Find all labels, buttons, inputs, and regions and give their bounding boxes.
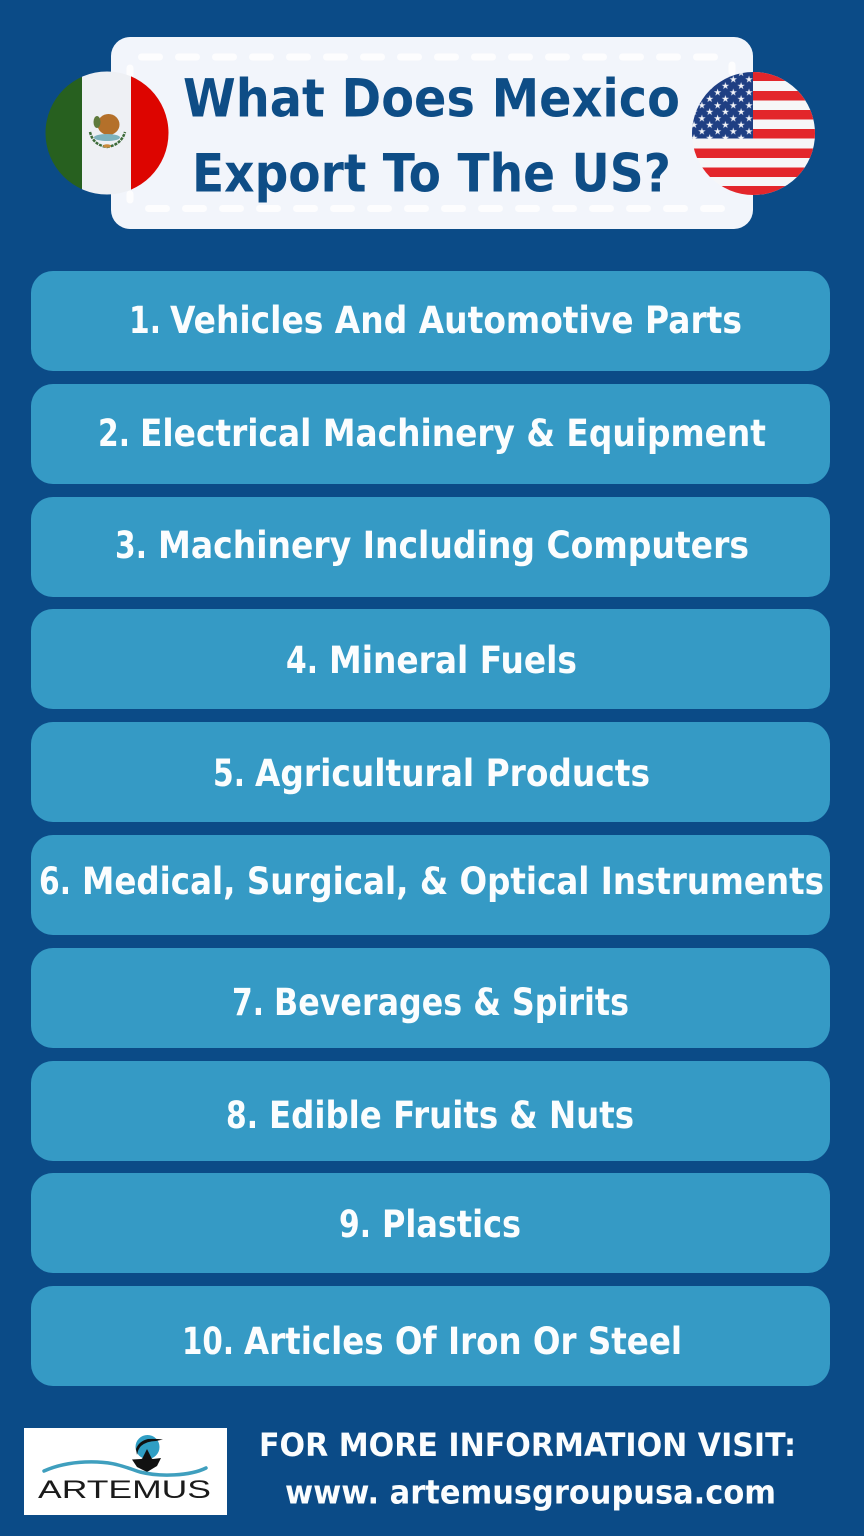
panel: item 4: 4.: [286, 639, 318, 682]
panel: item 9: 9.: [339, 1203, 371, 1246]
panel: item 1: [31, 271, 830, 371]
panel: item 8: 8.: [226, 1094, 258, 1137]
panel: item 6: 6.: [39, 860, 71, 903]
panel: item 5: 5.: [213, 752, 245, 795]
panel: item 4: [31, 609, 830, 709]
title text: Export To The US?: [192, 144, 671, 204]
panel: item 3: 3.: [115, 524, 147, 567]
panel: item 2: Electrical Machinery & Equipment: [140, 412, 766, 455]
panel: item 9: [31, 1173, 830, 1273]
panel: item 4: Mineral Fuels: [329, 639, 577, 682]
panel: item 2: 2.: [98, 412, 130, 455]
panel: item 8: Edible Fruits & Nuts: [269, 1094, 634, 1137]
panel: item 5: Agricultural Products: [255, 752, 650, 795]
panel: item 10: [31, 1286, 830, 1386]
panel: item 10: Articles Of Iron Or Steel: [244, 1320, 682, 1363]
icon: US flag: [692, 72, 816, 196]
title text: What Does Mexico: [183, 68, 680, 130]
panel: item 7: Beverages & Spirits: [274, 981, 629, 1024]
panel: item 8: [31, 1061, 830, 1161]
logo: Artemus: ARTEMUS: [38, 1476, 211, 1504]
panel: item 3: [31, 497, 830, 597]
footer text: FOR MORE INFORMATION VISIT:: [259, 1426, 796, 1464]
footer text: [259, 1426, 796, 1512]
panel: item 10: 10.: [182, 1320, 234, 1363]
panel: item 7: [31, 948, 830, 1048]
panel: item 2: [31, 384, 830, 484]
panel: item 1: Vehicles And Automotive Parts: [170, 299, 742, 342]
title text: [183, 68, 680, 204]
title panel: [111, 37, 753, 229]
panel: item 3: Machinery Including Computers: [158, 524, 749, 567]
logo: Artemus: [24, 1428, 227, 1515]
footer text: www. artemusgroupusa.com: [285, 1472, 776, 1512]
panel: item 7: 7.: [232, 981, 264, 1024]
panel: item 9: Plastics: [382, 1203, 521, 1246]
panel: item 1: 1.: [129, 299, 161, 342]
panel: item 5: [31, 722, 830, 822]
panel: item 6: [31, 835, 830, 935]
icon: Mexico flag: [45, 71, 169, 195]
